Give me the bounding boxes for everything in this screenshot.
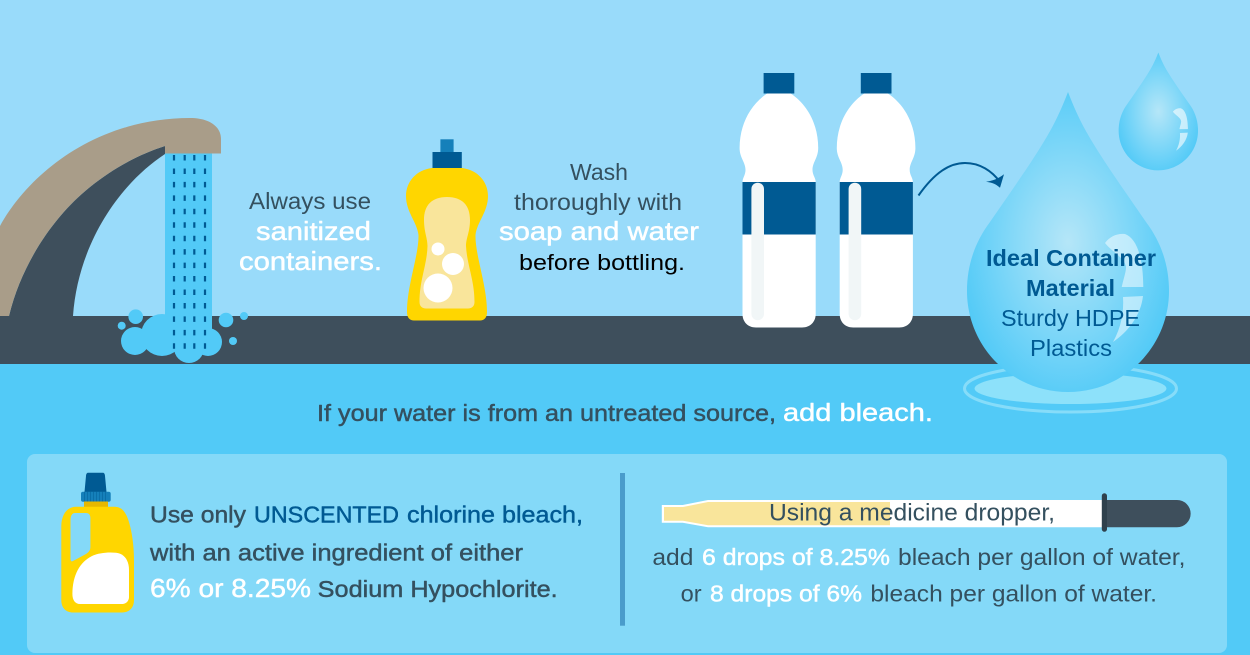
text: unscented chlorine bleach: with an active ingredient of either: [149, 540, 523, 566]
large water drop with label: Material: [1026, 275, 1115, 301]
text: dropper instructions: add: [652, 544, 693, 570]
large water drop with label: Plastics: [1030, 335, 1112, 361]
text: dropper instructions: [652, 500, 1186, 607]
text: wash with soap and water: soap and water: [499, 216, 699, 246]
sky background: [0, 0, 1250, 316]
text: dropper instructions: 6 drops of 8.25%: [702, 544, 890, 570]
heading: untreated source: [317, 399, 933, 427]
text: unscented chlorine bleach: chlorine bleach,: [407, 502, 583, 528]
heading: untreated source: If your water is from an untreated source,: [317, 400, 776, 426]
text: wash with soap and water: [499, 159, 699, 275]
text: dropper instructions: 8 drops of 6%: [710, 581, 862, 607]
arrow: bottles to drop: [918, 163, 1004, 196]
icon: small water drop: [1119, 52, 1198, 170]
icon: dish soap bottle: [406, 139, 488, 320]
text: unscented chlorine bleach: [149, 502, 583, 603]
counter top: [0, 316, 1250, 364]
icon: faucet: [0, 118, 221, 316]
text: dropper instructions: Using a medicine dropper,: [769, 500, 1055, 527]
text: unscented chlorine bleach: Use only: [150, 502, 247, 528]
text: dropper instructions: bleach per gallon of water.: [870, 581, 1157, 607]
text: dropper instructions: bleach per gallon of water,: [898, 544, 1186, 570]
large water drop with label: Ideal Container: [986, 245, 1156, 271]
text: always use sanitized containers: Always use: [249, 188, 371, 214]
divider: [620, 473, 625, 626]
text: always use sanitized containers: containers.: [239, 246, 382, 276]
text: wash with soap and water: before bottling.: [519, 250, 685, 275]
lower water background: [0, 364, 1250, 655]
text: dropper instructions: or: [681, 581, 702, 607]
heading: untreated source: add bleach.: [783, 399, 933, 427]
ripple under large drop: [964, 365, 1176, 412]
icon: medicine dropper: [662, 493, 1191, 532]
large water drop with label: Sturdy HDPE: [1001, 305, 1140, 331]
large water drop with label: [967, 92, 1169, 392]
icon: bleach jug: [61, 473, 134, 612]
text: unscented chlorine bleach: 6% or 8.25%: [150, 573, 311, 603]
text: unscented chlorine bleach: UNSCENTED: [254, 502, 399, 528]
text: wash with soap and water: thoroughly with: [514, 189, 682, 215]
text: always use sanitized containers: [239, 188, 382, 276]
text: always use sanitized containers: sanitized: [256, 216, 371, 246]
text: wash with soap and water: Wash: [570, 159, 628, 185]
text: unscented chlorine bleach: Sodium Hypochlorite.: [318, 576, 558, 602]
icon: water bottle left: [740, 73, 818, 328]
icon: water bottle right: [837, 73, 915, 328]
icon: running water with bubbles: [118, 154, 248, 363]
panel: bleach instructions: [27, 454, 1227, 653]
